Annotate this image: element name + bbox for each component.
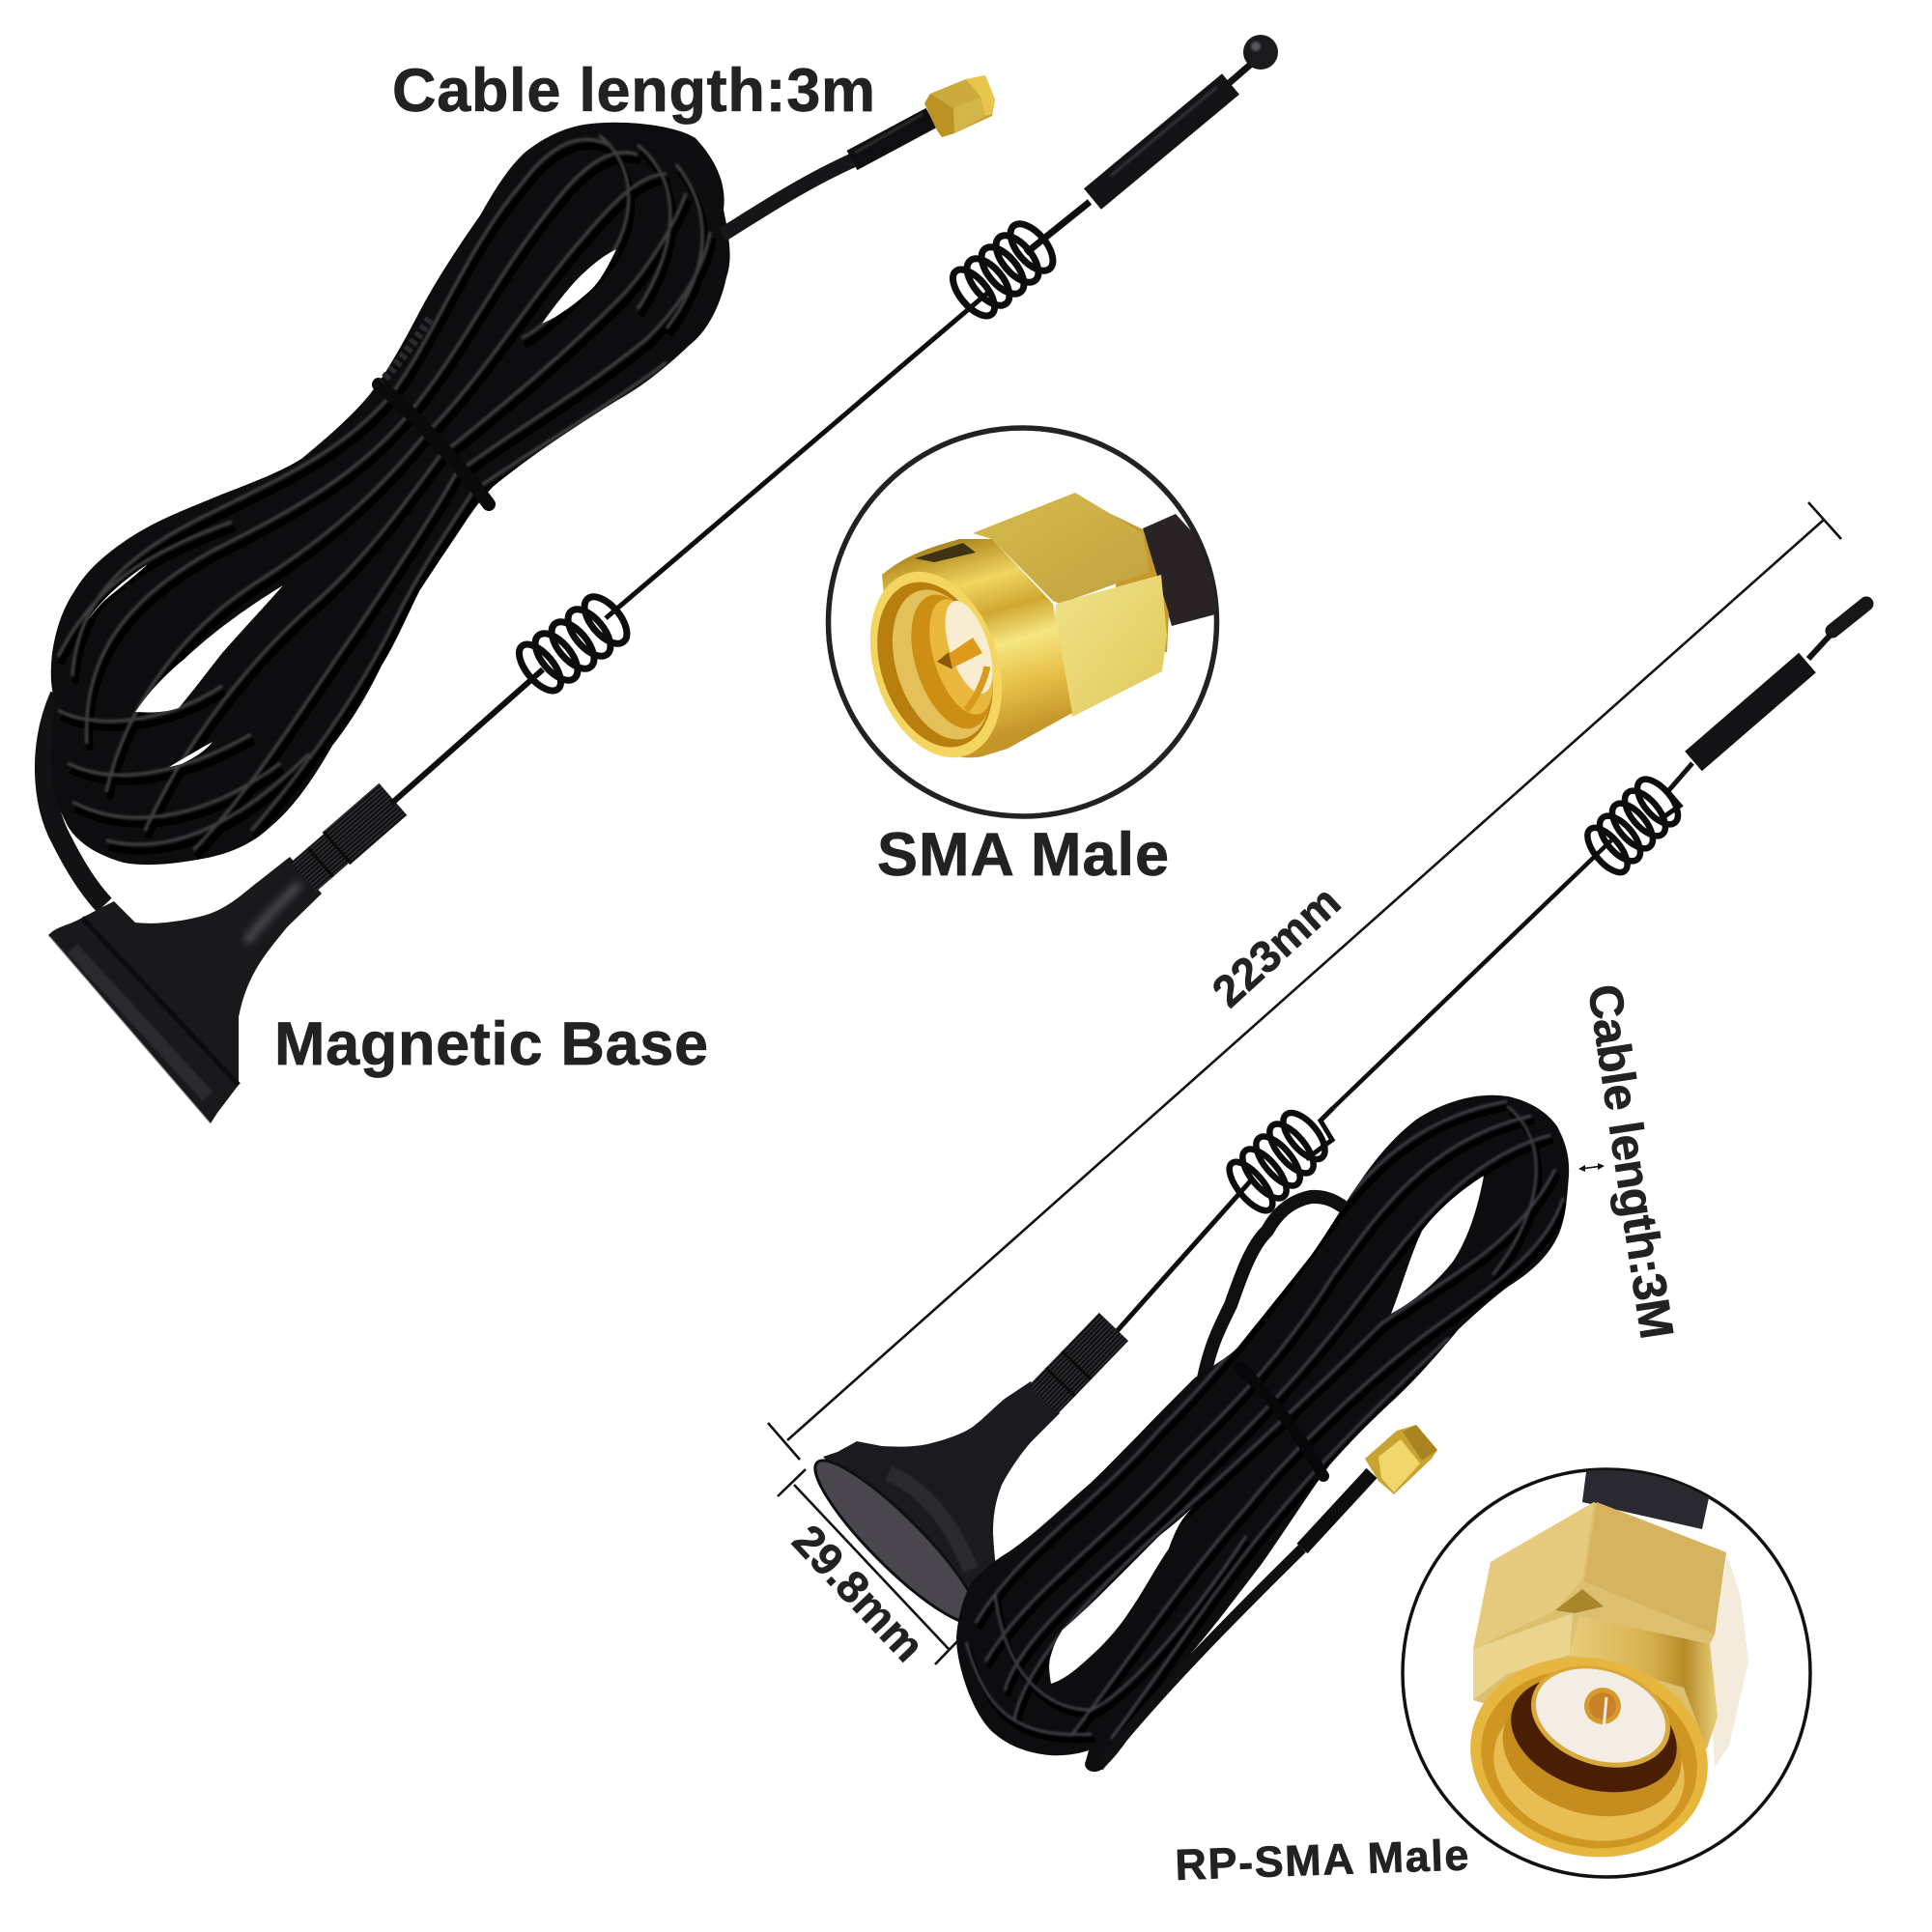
- right knurled antenna collar: [1029, 1313, 1128, 1414]
- left antenna tube and ball tip: [1093, 35, 1278, 199]
- dimension: 223mm line: [768, 502, 1841, 1460]
- collar facets: [1473, 1613, 1573, 1700]
- right antenna cable bundle: [956, 1095, 1569, 1772]
- cable length arrow: [1578, 1163, 1605, 1172]
- dimension label: 223mm: 223mm: [1203, 876, 1350, 1016]
- upper coil: [946, 216, 1061, 323]
- cable stub: [1582, 1470, 1709, 1529]
- pin socket: [1584, 1688, 1621, 1724]
- cable tie band: [379, 384, 489, 504]
- dimension label: cable length right: Cable length:3M: [1577, 981, 1683, 1342]
- cable tie band: [1239, 1367, 1323, 1476]
- barrel: [882, 539, 1072, 757]
- left hex facet: [1473, 1502, 1594, 1649]
- dimension label: 29.8mm: 29.8mm: [783, 1515, 934, 1671]
- right antenna tip and tube: [1667, 604, 1866, 792]
- cable loop: [1203, 1197, 1352, 1383]
- hex nut front facet: [1053, 575, 1167, 717]
- heading: cable length left: Cable length:3m: [392, 57, 875, 125]
- left antenna cable bundle: [44, 123, 730, 905]
- right RP-SMA small connector: [1365, 1425, 1437, 1494]
- coiled cable silhouette: [956, 1095, 1569, 1772]
- right antenna whip with coils: [1111, 773, 1686, 1338]
- cable from magnetic base: [44, 696, 104, 905]
- label: RP-SMA male: RP-SMA Male: [1175, 1830, 1469, 1889]
- left SMA cable and connector: [723, 75, 995, 235]
- callout: RP-SMA male connector: [1403, 1449, 1810, 1882]
- label: SMA male: SMA Male: [877, 821, 1169, 889]
- rear rim: [924, 94, 954, 137]
- magnet face: [800, 1445, 993, 1638]
- hex front facet: [953, 97, 985, 133]
- hex top facet: [930, 79, 982, 108]
- upper coil: [1580, 773, 1686, 879]
- cable stub: [1143, 514, 1214, 626]
- right magnetic base: [800, 1381, 1060, 1638]
- right hex facet: [1584, 1502, 1726, 1634]
- tail cable: [1098, 1548, 1302, 1767]
- left magnetic base: [48, 857, 322, 1123]
- callout: SMA male connector: [829, 428, 1227, 816]
- label: magnetic base: Magnetic Base: [274, 1010, 708, 1078]
- white insulator: [1530, 1665, 1671, 1768]
- hex base: [1473, 1502, 1726, 1748]
- lower coil: [1222, 1106, 1332, 1217]
- left knurled antenna collar: [290, 783, 407, 894]
- far hex facet: [1707, 1555, 1748, 1768]
- connector mouth: [869, 572, 1002, 757]
- dimension: 29.8mm line: [778, 1469, 959, 1664]
- back rim: [1111, 514, 1169, 657]
- center pin: [949, 638, 982, 668]
- left antenna whip with coils: [391, 202, 1090, 804]
- coiled cable silhouette: [51, 123, 730, 865]
- front barrel: [966, 75, 995, 116]
- hex nut top facet: [973, 493, 1150, 604]
- lower coil: [512, 589, 635, 697]
- front ring: [1470, 1658, 1708, 1857]
